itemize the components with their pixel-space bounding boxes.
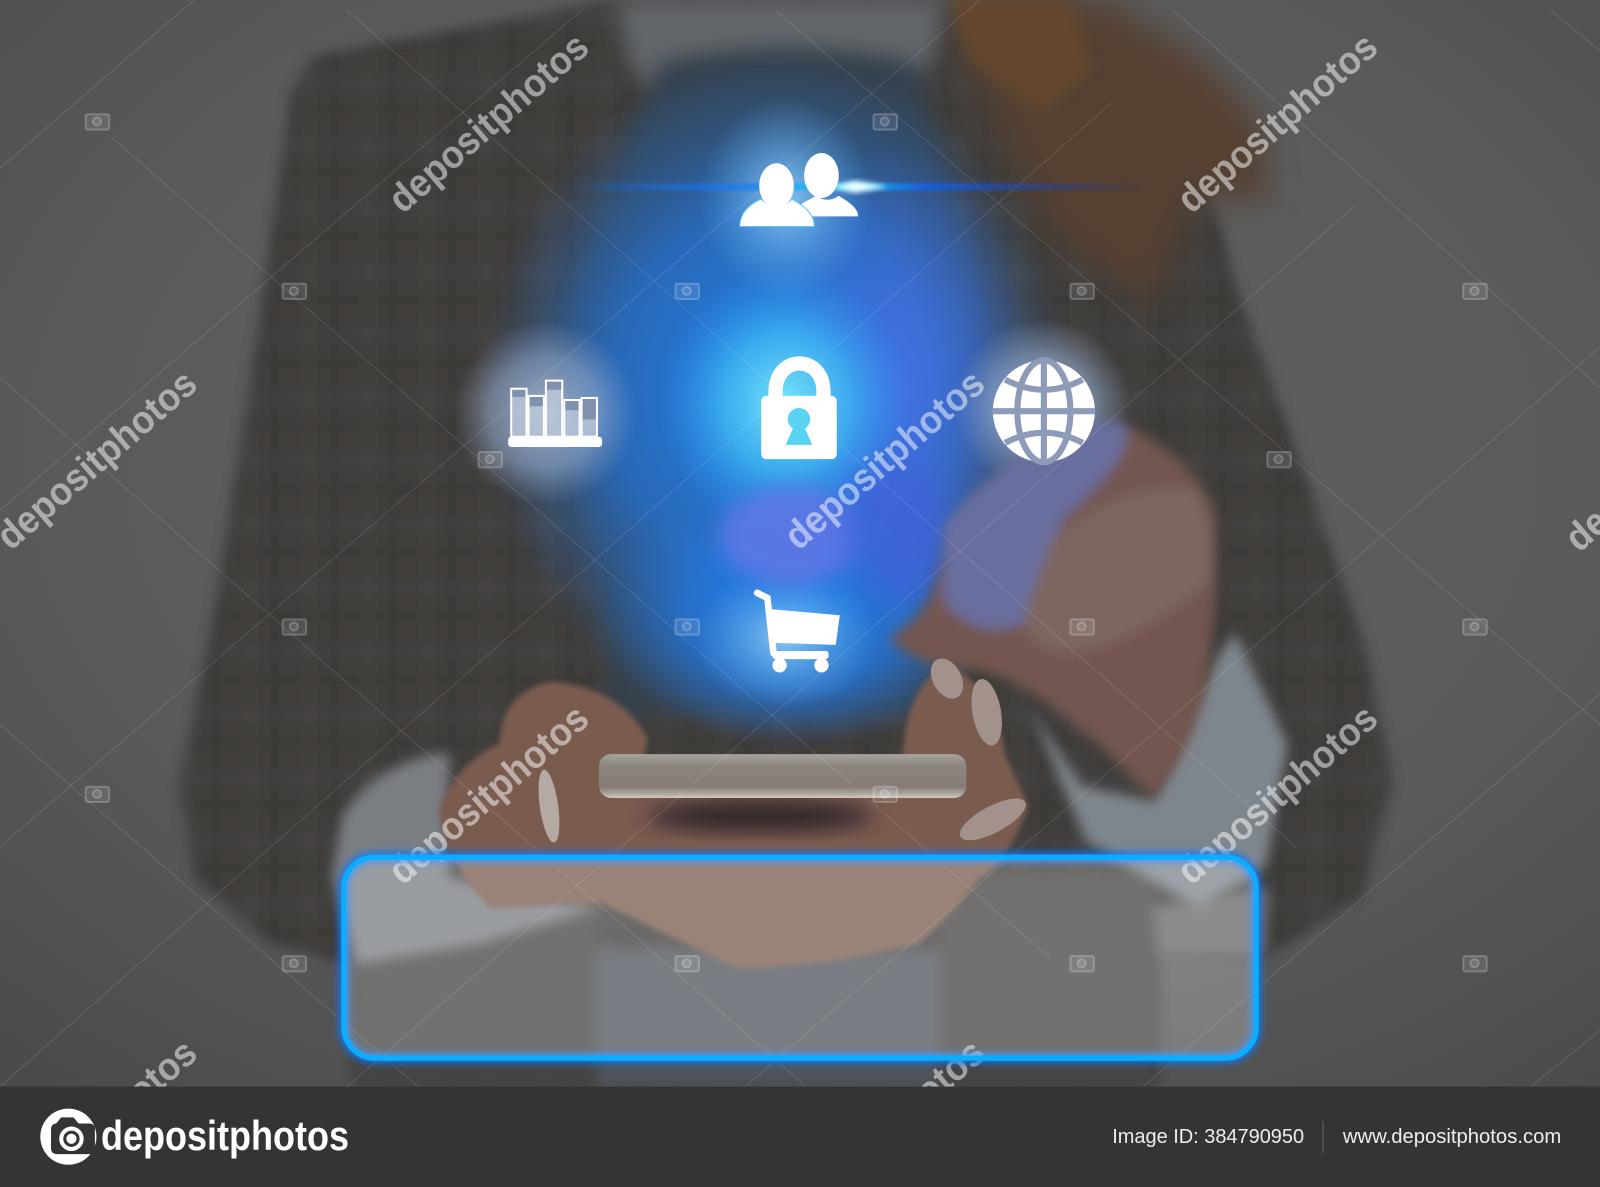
- text watermarks: depositphotos: [380, 25, 597, 221]
- footer bar: [0, 1087, 1600, 1187]
- holding hand: [439, 663, 1029, 967]
- icon: shopping cart: [757, 593, 840, 672]
- icon: globe: [993, 360, 1095, 462]
- icon: padlock: [761, 364, 837, 459]
- left sleeve cuff: [332, 753, 602, 964]
- right sleeve cuff: [1031, 633, 1288, 908]
- shirt and collar: [571, 0, 980, 714]
- lens flare: [571, 181, 1143, 193]
- footer logo icon: [40, 1109, 96, 1165]
- text watermarks: depositphotos: [380, 696, 597, 893]
- text watermarks: depositphotos: [1169, 696, 1386, 893]
- footer brand name: depositphotos: [101, 1112, 349, 1159]
- icon: bar chart: [508, 381, 602, 447]
- text watermarks: depositphotos: [1169, 25, 1386, 221]
- hair: [944, 0, 1270, 306]
- text watermarks: depositphotos: [776, 362, 993, 558]
- jacket: [179, 0, 1393, 1087]
- empty rounded text box: [344, 857, 1256, 1058]
- blue light glow: [454, 56, 1133, 750]
- website url: www.depositphotos.com: [1342, 1126, 1561, 1148]
- smartphone: [599, 754, 966, 798]
- image id: Image ID: 384790950: [1112, 1126, 1304, 1148]
- footer divider: [1322, 1121, 1323, 1153]
- camera watermarks: [86, 114, 1487, 971]
- icon: people: [740, 153, 858, 227]
- fingernails: [535, 653, 1032, 848]
- pointing hand: [888, 421, 1216, 798]
